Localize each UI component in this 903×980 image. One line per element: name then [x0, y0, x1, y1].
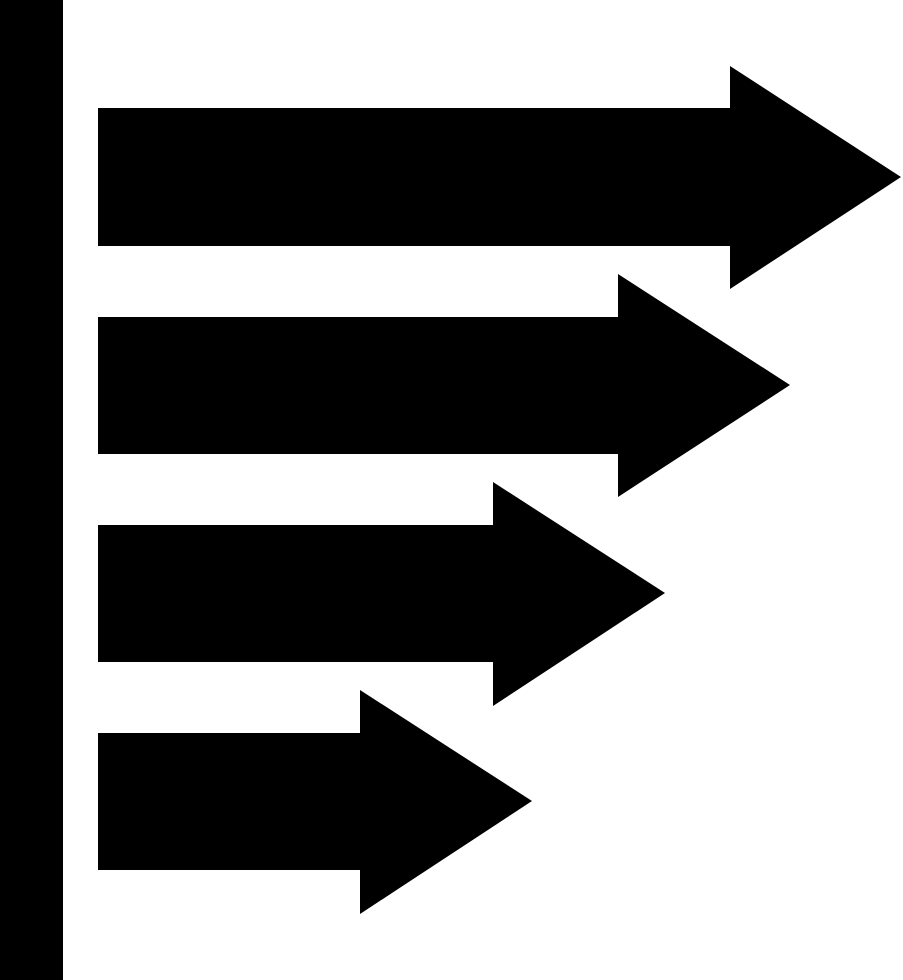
arrow 4	[98, 690, 532, 914]
arrow 1	[98, 66, 901, 289]
arrow 3	[98, 482, 665, 706]
arrow 2	[98, 274, 790, 497]
vertical bar	[0, 0, 63, 980]
